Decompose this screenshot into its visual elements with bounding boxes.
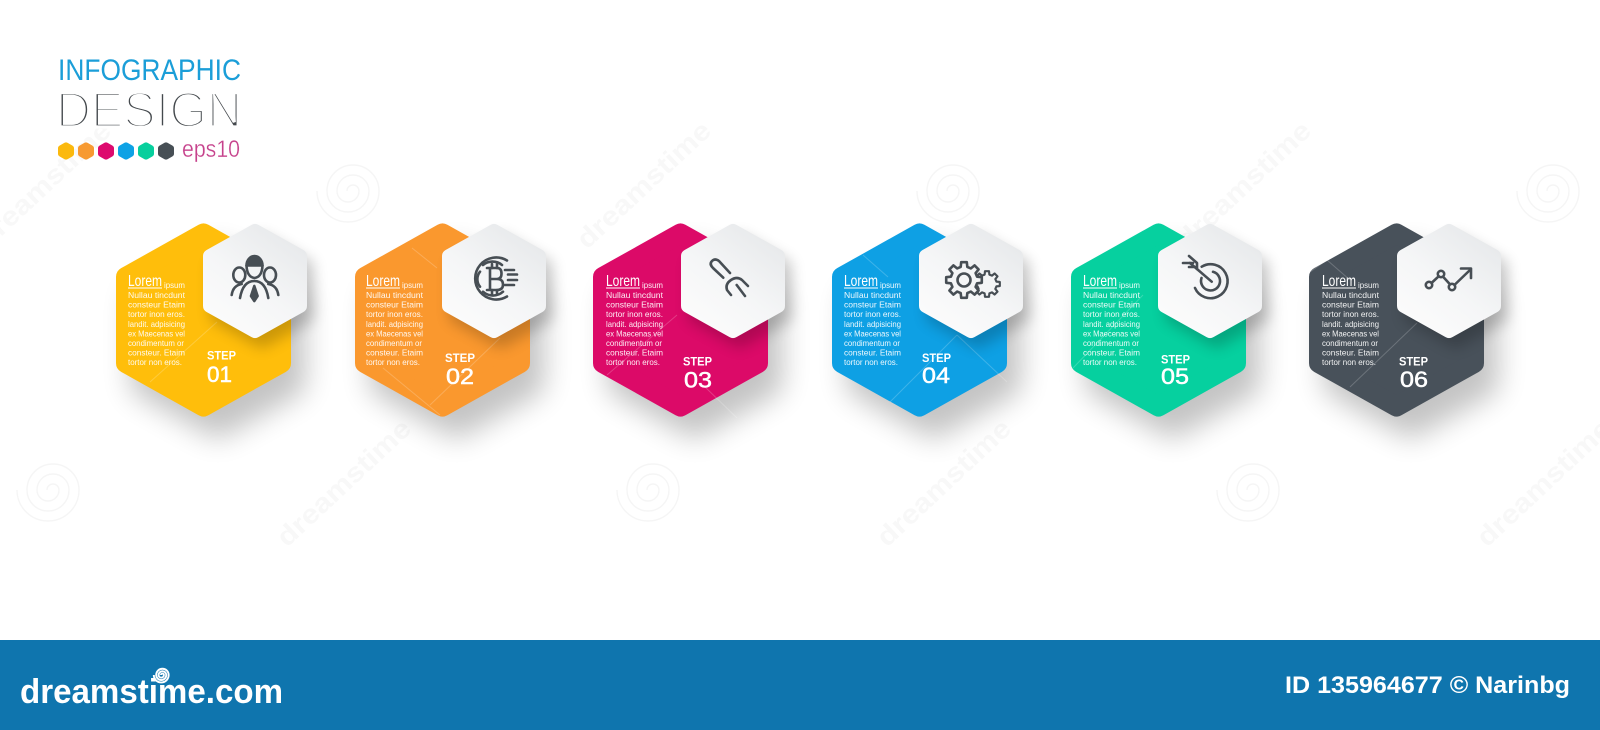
text block: step 01: condimentum or (128, 338, 184, 348)
hexagon: white badge 04 (926, 231, 1016, 331)
text block: step 05 (1083, 273, 1141, 367)
text block: step 05: consteur Etaim (1083, 300, 1140, 310)
text block: step 04 (844, 273, 902, 367)
text block: step 01: tortor inon eros. (128, 309, 185, 319)
hexagon: dark grey (1319, 234, 1474, 406)
title: INFOGRAPHIC: INFOGRAPHIC (58, 54, 241, 87)
text block: step 03 (606, 273, 664, 367)
text block: step 03: tortor non eros. (606, 357, 660, 367)
text block: step 02: Lorem (366, 273, 400, 290)
text block: step 05: tortor inon eros. (1083, 309, 1140, 319)
text block: step 06: condimentum or (1322, 338, 1378, 348)
text block: step 03: condimentum or (606, 338, 662, 348)
text block: step 05: ex Maecenas vel (1083, 328, 1140, 338)
panel: step 06 dark (1310, 231, 1501, 428)
step label 02: STEP (445, 351, 475, 365)
text block: step 05: Nullau tincdunt (1083, 290, 1141, 300)
step label 02: 02 (446, 364, 474, 389)
text block: step 03: Nullau tincdunt (606, 290, 664, 300)
step label 06 (1399, 354, 1428, 392)
hexagon: white badge 02 (449, 231, 539, 331)
text block: step 06: tortor non eros. (1322, 357, 1376, 367)
hexagon: white badge 06 (1404, 231, 1494, 331)
text block: step 06: landit. adpisicing (1322, 319, 1379, 329)
watermark layer: dreamstime (871, 413, 1017, 552)
text block: step 04: tortor non eros. (844, 357, 898, 367)
watermark layer: dreamstime (1171, 115, 1317, 254)
text block: step 05: consteur. Etaim (1083, 348, 1140, 358)
text block: step 02 (366, 273, 424, 367)
text block: step 04: consteur. Etaim (844, 348, 901, 358)
text block: step 01: consteur. Etaim (128, 348, 185, 358)
text block: step 01: Nullau tincdunt (128, 290, 186, 300)
text block: step 06: consteur Etaim (1322, 300, 1379, 310)
watermark layer: dreamstime (1471, 413, 1600, 552)
hexagon: orange (365, 234, 520, 406)
text block: step 02: consteur. Etaim (366, 348, 423, 358)
hexagon: blue (842, 234, 997, 406)
text block: step 04: condimentum or (844, 338, 900, 348)
hexagon: white badge 03 (688, 231, 778, 331)
text block: step 06: tortor inon eros. (1322, 309, 1379, 319)
step label 03: STEP (683, 354, 712, 368)
text block: step 03: Lorem (606, 273, 640, 290)
icon: trend line arrow (1426, 268, 1471, 290)
icon: team (232, 256, 278, 301)
text block: step 05: condimentum or (1083, 338, 1139, 348)
step label 05: STEP (1161, 352, 1190, 366)
text block: step 06: ex Maecenas vel (1322, 328, 1379, 338)
panel: step 02 orange (365, 231, 546, 428)
text block: step 02: tortor non eros. (366, 357, 420, 367)
text block: step 04: Nullau tincdunt (844, 290, 902, 300)
text block: step 03: consteur. Etaim (606, 348, 663, 358)
text block: step 02: ipsum (402, 280, 423, 290)
text block: step 06: Nullau tincdunt (1322, 290, 1380, 300)
text block: step 02: ex Maecenas vel (366, 328, 423, 338)
step label 03: 03 (684, 368, 712, 392)
icon: bitcoin coin (475, 258, 517, 300)
text block: step 01: landit. adpisicing (128, 319, 185, 329)
text block: step 01: Lorem (128, 273, 162, 290)
eps10 label: eps10 (182, 136, 240, 163)
text block: step 06: consteur. Etaim (1322, 348, 1379, 358)
text block: step 05: ipsum (1119, 280, 1140, 290)
title logo: infographic design eps10 (56, 54, 242, 163)
watermark layer: dreamstime (571, 115, 717, 254)
text block: step 06: ipsum (1358, 280, 1379, 290)
text block: step 01: tortor non eros. (128, 357, 182, 367)
text block: step 06: Lorem (1322, 273, 1356, 290)
footer bar (0, 640, 1600, 730)
step label 04 (922, 351, 951, 388)
step label 01 (207, 348, 236, 387)
footer id and author: ID 135964677 © Narinbg (1285, 672, 1570, 699)
hexagon: white badge 05 (1165, 231, 1255, 331)
text block: step 01 (128, 273, 186, 367)
text block: step 02: condimentum or (366, 338, 422, 348)
text block: step 03: consteur Etaim (606, 300, 663, 310)
step label 03 (683, 354, 712, 392)
panel: step 04 blue (842, 231, 1023, 428)
text block: step 04: ipsum (880, 280, 901, 290)
watermark layer: dreamstime (271, 413, 417, 552)
text block: step 01: ipsum (164, 280, 185, 290)
text block: step 06 (1322, 273, 1380, 367)
text block: step 03: landit. adpisicing (606, 319, 663, 329)
text block: step 02: tortor inon eros. (366, 309, 423, 319)
step label 05 (1161, 352, 1190, 389)
text block: step 02: consteur Etaim (366, 300, 423, 310)
text block: step 04: consteur Etaim (844, 300, 901, 310)
step label 01: STEP (207, 348, 236, 362)
text block: step 05: Lorem (1083, 273, 1117, 290)
step label 06: 06 (1400, 367, 1428, 392)
text block: step 04: tortor inon eros. (844, 309, 901, 319)
step label 04: STEP (922, 351, 951, 365)
text block: step 03: ipsum (642, 280, 663, 290)
hexagon: white badge 01 (210, 231, 300, 331)
text block: step 04: ex Maecenas vel (844, 328, 901, 338)
step label 01: 01 (207, 362, 232, 387)
hexagon: yellow (126, 234, 281, 406)
text block: step 03: tortor inon eros. (606, 309, 663, 319)
step label 06: STEP (1399, 354, 1428, 368)
icon: gears (946, 262, 1000, 298)
panel: step 03 pink (603, 231, 785, 428)
hexagon: pink (603, 234, 758, 406)
icon: target with arrow (1183, 256, 1228, 298)
text block: step 04: landit. adpisicing (844, 319, 901, 329)
text block: step 02: landit. adpisicing (366, 319, 423, 329)
hexagon: green (1081, 234, 1236, 406)
title: DESIGN: DESIGN (56, 82, 242, 138)
text block: step 03: ex Maecenas vel (606, 328, 663, 338)
step label 02 (445, 351, 475, 389)
text block: step 05: landit. adpisicing (1083, 319, 1140, 329)
step label 04: 04 (922, 363, 950, 388)
text block: step 05: tortor non eros. (1083, 357, 1137, 367)
text block: step 01: ex Maecenas vel (128, 328, 185, 338)
panel: step 01 yellow (126, 231, 307, 428)
text block: step 04: Lorem (844, 273, 878, 290)
panel: step 05 green (1073, 231, 1262, 428)
step label 05: 05 (1161, 364, 1189, 389)
footer logo: dreamstime.com: dreamstime.com (20, 673, 283, 711)
colour hexagon dots (61, 145, 171, 157)
icon: chain link (711, 260, 748, 296)
text block: step 01: consteur Etaim (128, 300, 185, 310)
text block: step 02: Nullau tincdunt (366, 290, 424, 300)
watermark layer (0, 115, 1600, 552)
